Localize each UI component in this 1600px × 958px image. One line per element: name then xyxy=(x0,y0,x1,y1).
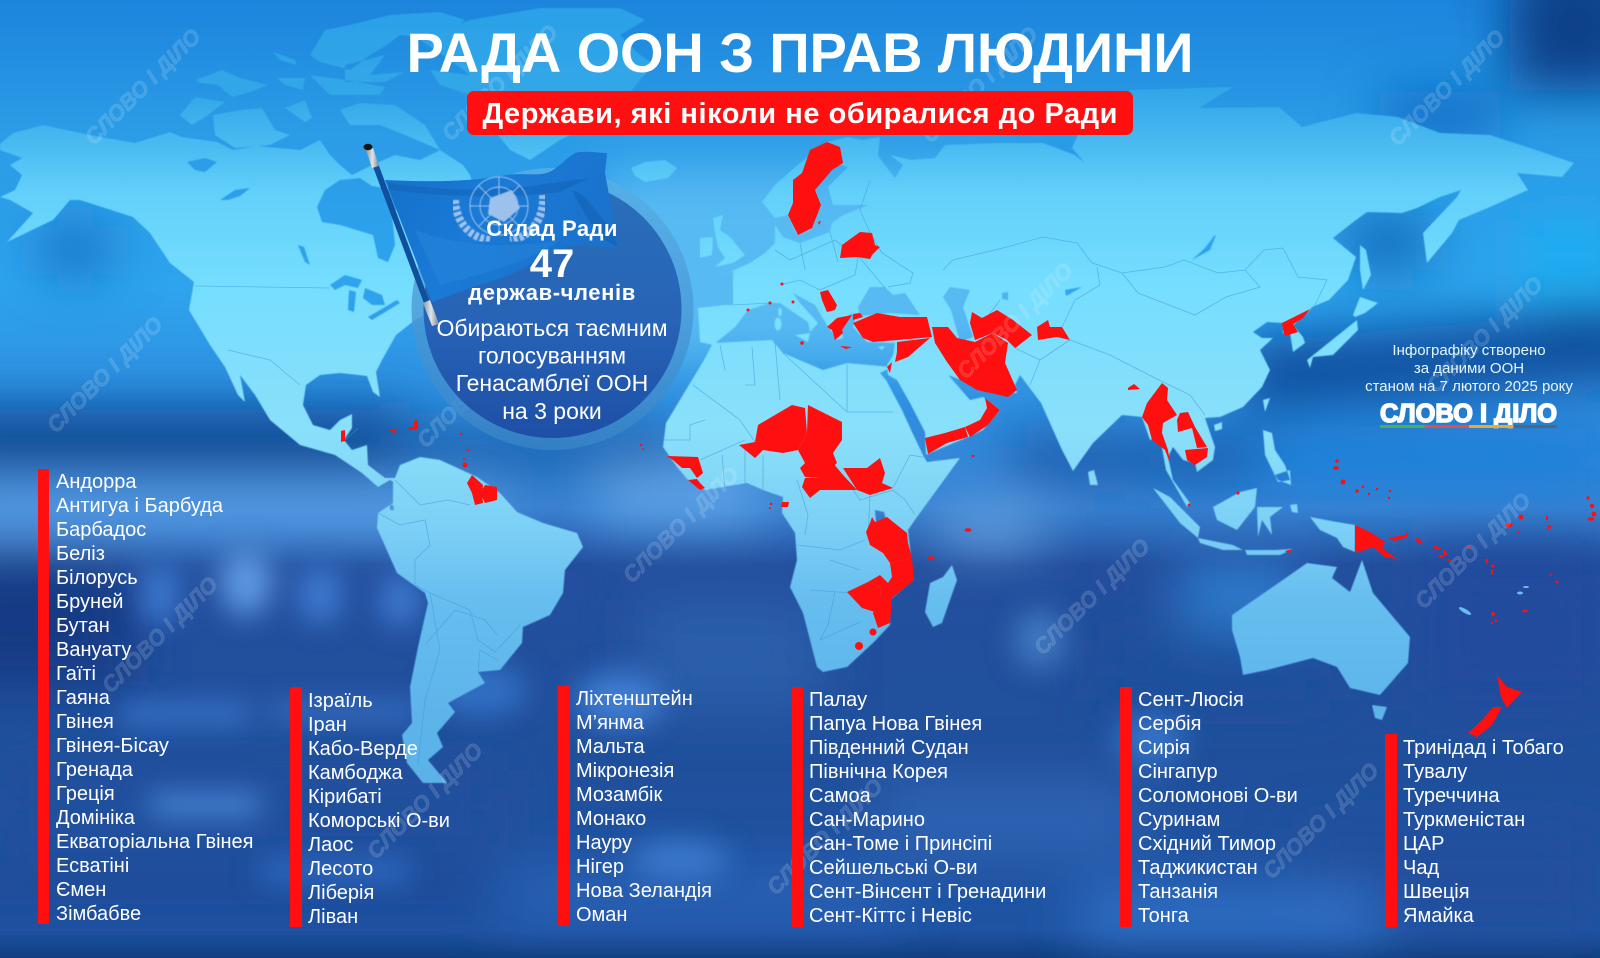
list column 1: Бруней xyxy=(56,591,123,613)
list column 3: Оман xyxy=(576,904,627,926)
logo: Слово і Діло: СЛОВО І ДІЛО xyxy=(1380,398,1557,428)
list column 5: Танзанія xyxy=(1138,881,1218,903)
never-elected countries: Africa and Arabia xyxy=(640,398,1000,650)
list column 2: Лесото xyxy=(308,858,373,880)
panel: council composition circle xyxy=(364,144,694,450)
list column 5: Сербія xyxy=(1138,713,1201,735)
list column 1: Гаїті xyxy=(56,663,96,685)
list column 1 xyxy=(38,469,254,925)
list column 2: Камбоджа xyxy=(308,762,403,784)
list column 6: Швеція xyxy=(1403,881,1470,903)
list column 5: Тонга xyxy=(1138,905,1190,927)
list column 5: Сінгапур xyxy=(1138,761,1218,783)
list column 1: Вануату xyxy=(56,639,131,661)
watermarks: СЛОВО І ДІЛО: СЛОВО І ДІЛО xyxy=(80,24,206,150)
source note: за даними ООН xyxy=(1414,360,1524,377)
subtitle banner: Держави, які ніколи не обиралися до Ради xyxy=(482,98,1118,130)
list column 3: Мозамбік xyxy=(576,784,662,806)
watermarks: СЛОВО І ДІЛО: СЛОВО І ДІЛО xyxy=(1410,488,1536,614)
list column 5: Таджикистан xyxy=(1138,857,1258,879)
list column 3: Монако xyxy=(576,808,646,830)
list column 1: Бутан xyxy=(56,615,110,637)
list column 6: Туркменістан xyxy=(1403,809,1525,831)
list column 3: Нігер xyxy=(576,856,624,878)
list column 6: Ямайка xyxy=(1403,905,1475,927)
list column 5: Сент-Люсія xyxy=(1138,689,1244,711)
list column 1: Гвінея-Бісау xyxy=(56,735,169,757)
list column 2: Іран xyxy=(308,714,347,736)
watermarks: СЛОВО І ДІЛО: СЛОВО І ДІЛО xyxy=(437,20,563,146)
text: Склад Ради: Склад Ради xyxy=(486,216,618,241)
text: election description: на 3 роки xyxy=(502,398,602,424)
watermarks: СЛОВО І ДІЛО: СЛОВО І ДІЛО xyxy=(97,572,223,698)
list column 6: Тувалу xyxy=(1403,761,1467,783)
subtitle banner xyxy=(467,91,1133,135)
Eurasia xyxy=(698,87,1574,507)
list column 2: Ізраїль xyxy=(308,690,373,712)
list column 1: Зімбабве xyxy=(56,903,141,925)
list column 6: Чад xyxy=(1403,857,1439,879)
source note: станом на 7 лютого 2025 року xyxy=(1365,378,1573,395)
list column 1: Гренада xyxy=(56,759,134,781)
watermarks: СЛОВО І ДІЛО: СЛОВО І ДІЛО xyxy=(1029,534,1155,660)
list column 4: Сент-Вінсент і Гренадини xyxy=(809,881,1046,903)
UN emblem xyxy=(455,177,543,240)
South America xyxy=(377,457,583,783)
list column 2 xyxy=(290,687,450,928)
list column 3: Науру xyxy=(576,832,632,854)
source note: Інфографіку створено xyxy=(1392,342,1546,359)
list column 5 xyxy=(1120,687,1298,927)
list column 4: Сейшельські О-ви xyxy=(809,857,978,879)
watermarks: СЛОВО І ДІЛО: СЛОВО І ДІЛО xyxy=(1422,272,1548,398)
list column 5: Соломонові О-ви xyxy=(1138,785,1298,807)
watermarks: СЛОВО І ДІЛО: СЛОВО І ДІЛО xyxy=(362,738,488,864)
list column 4: Сан-Томе і Принсіпі xyxy=(809,833,992,855)
list column 6: Тринідад і Тобаго xyxy=(1403,737,1564,759)
list column 1: Барбадос xyxy=(56,519,146,541)
title: РАДА ООН З ПРАВ ЛЮДИНИ xyxy=(406,21,1194,84)
list column 1: Домініка xyxy=(56,807,136,829)
text: election description: голосуванням xyxy=(478,342,626,368)
list column 5: Сирія xyxy=(1138,737,1190,759)
list column 3: Мікронезія xyxy=(576,760,674,782)
watermarks: СЛОВО І ДІЛО: СЛОВО І ДІЛО xyxy=(762,774,888,900)
never-elected countries: Europe and Middle East xyxy=(746,142,1070,397)
landmass: continents xyxy=(0,8,1574,783)
watermarks: СЛОВО І ДІЛО: СЛОВО І ДІЛО xyxy=(412,327,538,453)
watermarks: СЛОВО І ДІЛО: СЛОВО І ДІЛО xyxy=(1384,25,1510,151)
watermarks: СЛОВО І ДІЛО: СЛОВО І ДІЛО xyxy=(618,462,744,588)
list column 2: Ліван xyxy=(308,906,358,928)
list column 1: Есватіні xyxy=(56,855,129,877)
list column 1: Греція xyxy=(56,783,115,805)
list column 2: Ліберія xyxy=(308,882,374,904)
never-elected countries: Asia and Oceania xyxy=(1128,309,1596,737)
list column 3: М’янма xyxy=(576,712,645,734)
list column 4: Палау xyxy=(809,689,867,711)
text: держав-членів: держав-членів xyxy=(468,280,636,305)
list column 3: Нова Зеландія xyxy=(576,880,712,902)
watermarks: СЛОВО І ДІЛО: СЛОВО І ДІЛО xyxy=(952,258,1078,384)
list column 1: Андорра xyxy=(56,471,137,493)
list column 2: Кабо-Верде xyxy=(308,738,418,760)
list column 6: ЦАР xyxy=(1403,833,1444,855)
list column 1: Гаяна xyxy=(56,687,111,709)
list column 2: Коморські О-ви xyxy=(308,810,450,832)
never-elected countries: Americas xyxy=(341,420,497,505)
list column 4: Самоа xyxy=(809,785,872,807)
icon: UN flag on pole xyxy=(364,144,618,326)
list column 2: Кірибаті xyxy=(308,786,382,808)
list column 1: Ємен xyxy=(56,879,106,901)
list column 3: Ліхтенштейн xyxy=(576,688,693,710)
small light-blue islands in the Pacific xyxy=(1458,586,1529,616)
text: 47: 47 xyxy=(530,242,574,286)
list column 6: Туреччина xyxy=(1403,785,1501,807)
list column 2: Лаос xyxy=(308,834,353,856)
list column 4: Сент-Кіттс і Невіс xyxy=(809,905,972,927)
Africa xyxy=(663,340,960,672)
list column 4: Папуа Нова Гвінея xyxy=(809,713,982,735)
watermarks: СЛОВО І ДІЛО: СЛОВО І ДІЛО xyxy=(42,312,168,438)
list column 4: Північна Корея xyxy=(809,761,948,783)
list column 4: Південний Судан xyxy=(809,737,969,759)
list column 1: Екваторіальна Гвінея xyxy=(56,831,254,853)
list column 4: Сан-Марино xyxy=(809,809,925,831)
list column 1: Гвінея xyxy=(56,711,114,733)
watermarks: СЛОВО І ДІЛО: СЛОВО І ДІЛО xyxy=(1258,758,1384,884)
list column 6 xyxy=(1385,734,1564,927)
list column 5: Східний Тимор xyxy=(1138,833,1276,855)
list column 4 xyxy=(792,687,1046,927)
country borders xyxy=(195,180,1327,765)
list column 1: Беліз xyxy=(56,543,105,565)
list column 1: Білорусь xyxy=(56,567,138,589)
list column 3: Мальта xyxy=(576,736,645,758)
list column 1: Антигуа і Барбуда xyxy=(56,495,224,517)
list column 3 xyxy=(558,686,712,926)
text: election description: Генасамблеї ООН xyxy=(456,370,648,396)
watermarks: СЛОВО І ДІЛО: СЛОВО І ДІЛО xyxy=(917,22,1043,148)
text: election description: Обираються таємним xyxy=(436,315,668,341)
list column 5: Суринам xyxy=(1138,809,1220,831)
